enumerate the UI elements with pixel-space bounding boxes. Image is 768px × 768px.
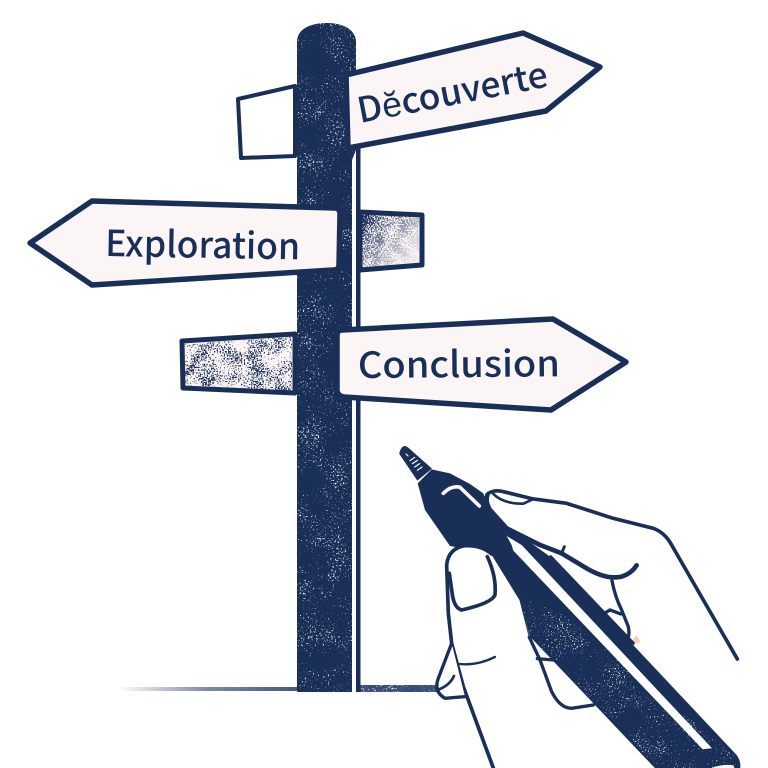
sign: Exploration (30, 201, 340, 285)
thumb (447, 546, 657, 768)
sign: Découverte (346, 33, 600, 148)
back panel: right dithered (360, 212, 422, 270)
ground shadow (118, 685, 438, 692)
label: Découverte: Dĕcouverte (352, 47, 552, 134)
hand holding pen (399, 446, 740, 768)
back panel: left dithered (182, 334, 295, 394)
label: Conclusion: Conclusion (358, 335, 560, 389)
icon: pen (399, 446, 740, 768)
sign: Conclusion (337, 319, 626, 410)
index finger and back of hand (487, 491, 737, 659)
back panel: blank white (238, 86, 295, 158)
skin tints (493, 546, 641, 768)
lower fingers (437, 554, 593, 708)
signpost pole (297, 20, 360, 694)
label: Exploration: Exploration (105, 215, 301, 270)
middle finger (602, 581, 629, 639)
